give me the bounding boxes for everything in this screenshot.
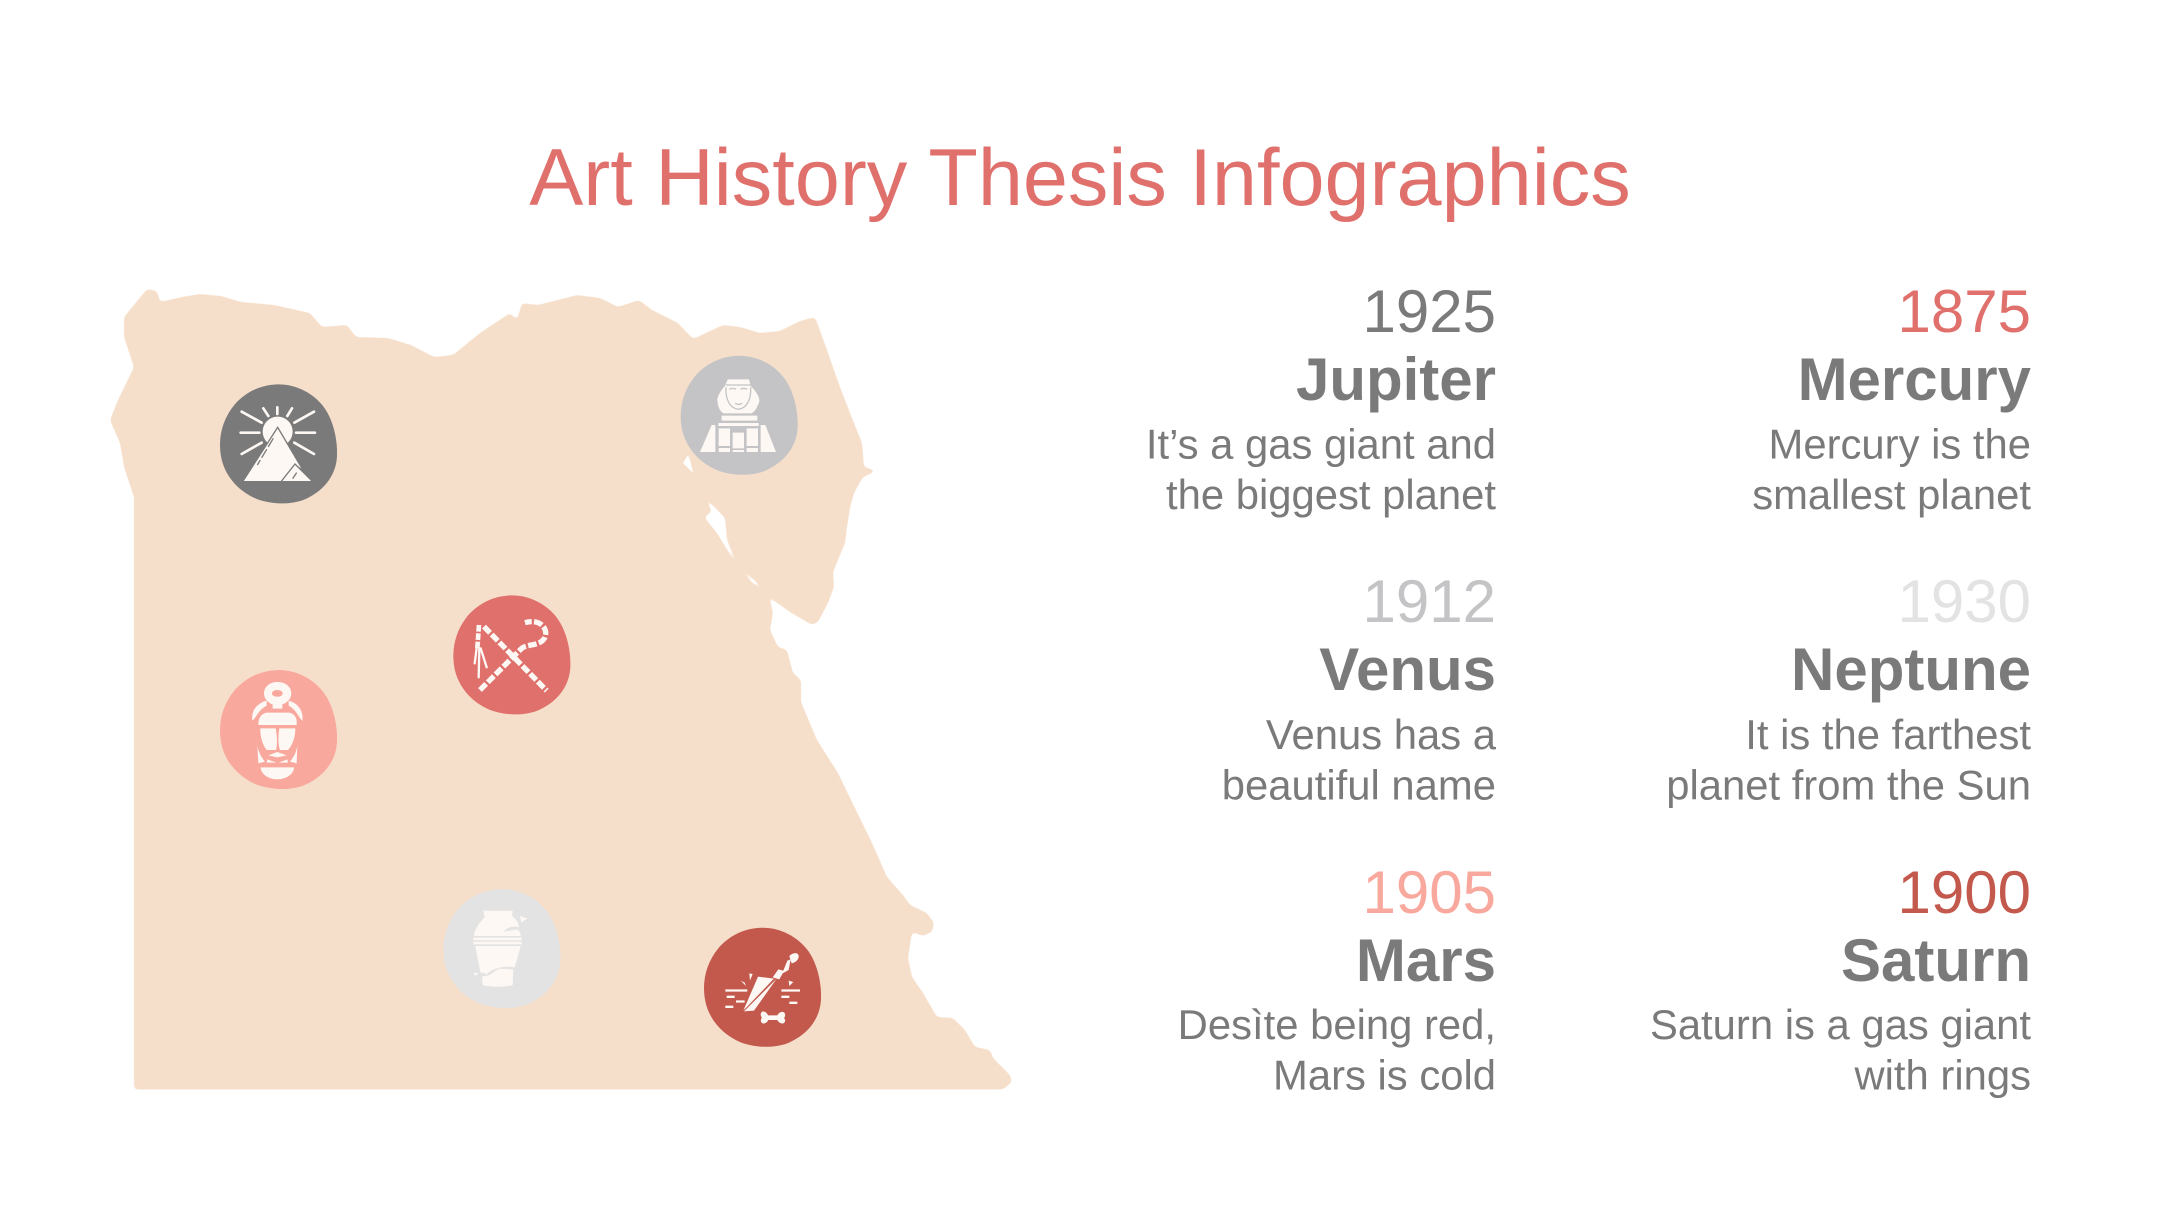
text block: Jupiter: Jupiter	[1296, 346, 1496, 413]
icon: crook and flail	[475, 622, 547, 691]
marker: scarab	[220, 670, 337, 789]
title: Art History Thesis Infographics	[529, 133, 1631, 223]
marker: crook and flail	[453, 595, 570, 714]
icon: pyramid and sun	[241, 407, 315, 482]
text block: Mars: 1905	[1363, 859, 1496, 926]
text block: Mars: Mars is cold	[1273, 1052, 1496, 1098]
text block: Mercury: Mercury	[1798, 346, 2032, 413]
marker: broken vase	[443, 889, 560, 1008]
text block: Venus: beautiful name	[1222, 762, 1496, 808]
text block: Jupiter: the biggest planet	[1166, 471, 1496, 518]
text block: Saturn: Saturn is a gas giant	[1650, 1001, 2031, 1048]
icon: scarab	[252, 682, 303, 779]
icon: trowel and bone	[725, 953, 800, 1023]
text block: Neptune: It is the farthest	[1745, 711, 2031, 758]
text block: Venus: Venus has a	[1266, 711, 1497, 758]
text block: Venus: 1912	[1363, 568, 1496, 635]
text block: Neptune: 1930	[1898, 568, 2031, 635]
text block: Mercury: 1875	[1898, 278, 2031, 345]
text block: Neptune: Neptune	[1791, 636, 2031, 703]
marker: archaeology trowel	[704, 928, 821, 1047]
text block: Saturn	[1650, 859, 2031, 1098]
text block: Jupiter: It’s a gas giant and	[1146, 420, 1496, 468]
icon: sphinx	[700, 379, 776, 452]
marker: pyramid and sun	[220, 384, 337, 503]
marker: sphinx	[681, 356, 798, 475]
icon: broken vase	[473, 911, 527, 987]
text block: Mercury: smallest planet	[1752, 471, 2031, 518]
text block: Saturn: 1900	[1898, 859, 2031, 926]
text block: Jupiter	[1146, 278, 1496, 518]
text block: Jupiter: 1925	[1363, 278, 1496, 345]
text block: Saturn: Saturn	[1841, 927, 2031, 994]
text block: Venus: Venus	[1319, 636, 1496, 703]
text block: Saturn: with rings	[1853, 1052, 2031, 1098]
text block: Mercury: Mercury is the	[1769, 420, 2031, 468]
text block: Mars: Desìte being red,	[1178, 1001, 1496, 1048]
text block: Mars: Mars	[1356, 927, 1496, 994]
text block: Neptune: planet from the Sun	[1666, 762, 2031, 808]
text block: Mercury	[1752, 278, 2032, 518]
map of Egypt	[110, 289, 1012, 1090]
text block: Neptune	[1666, 568, 2031, 808]
text block: Mars	[1178, 859, 1496, 1098]
text block: Venus	[1222, 568, 1497, 808]
